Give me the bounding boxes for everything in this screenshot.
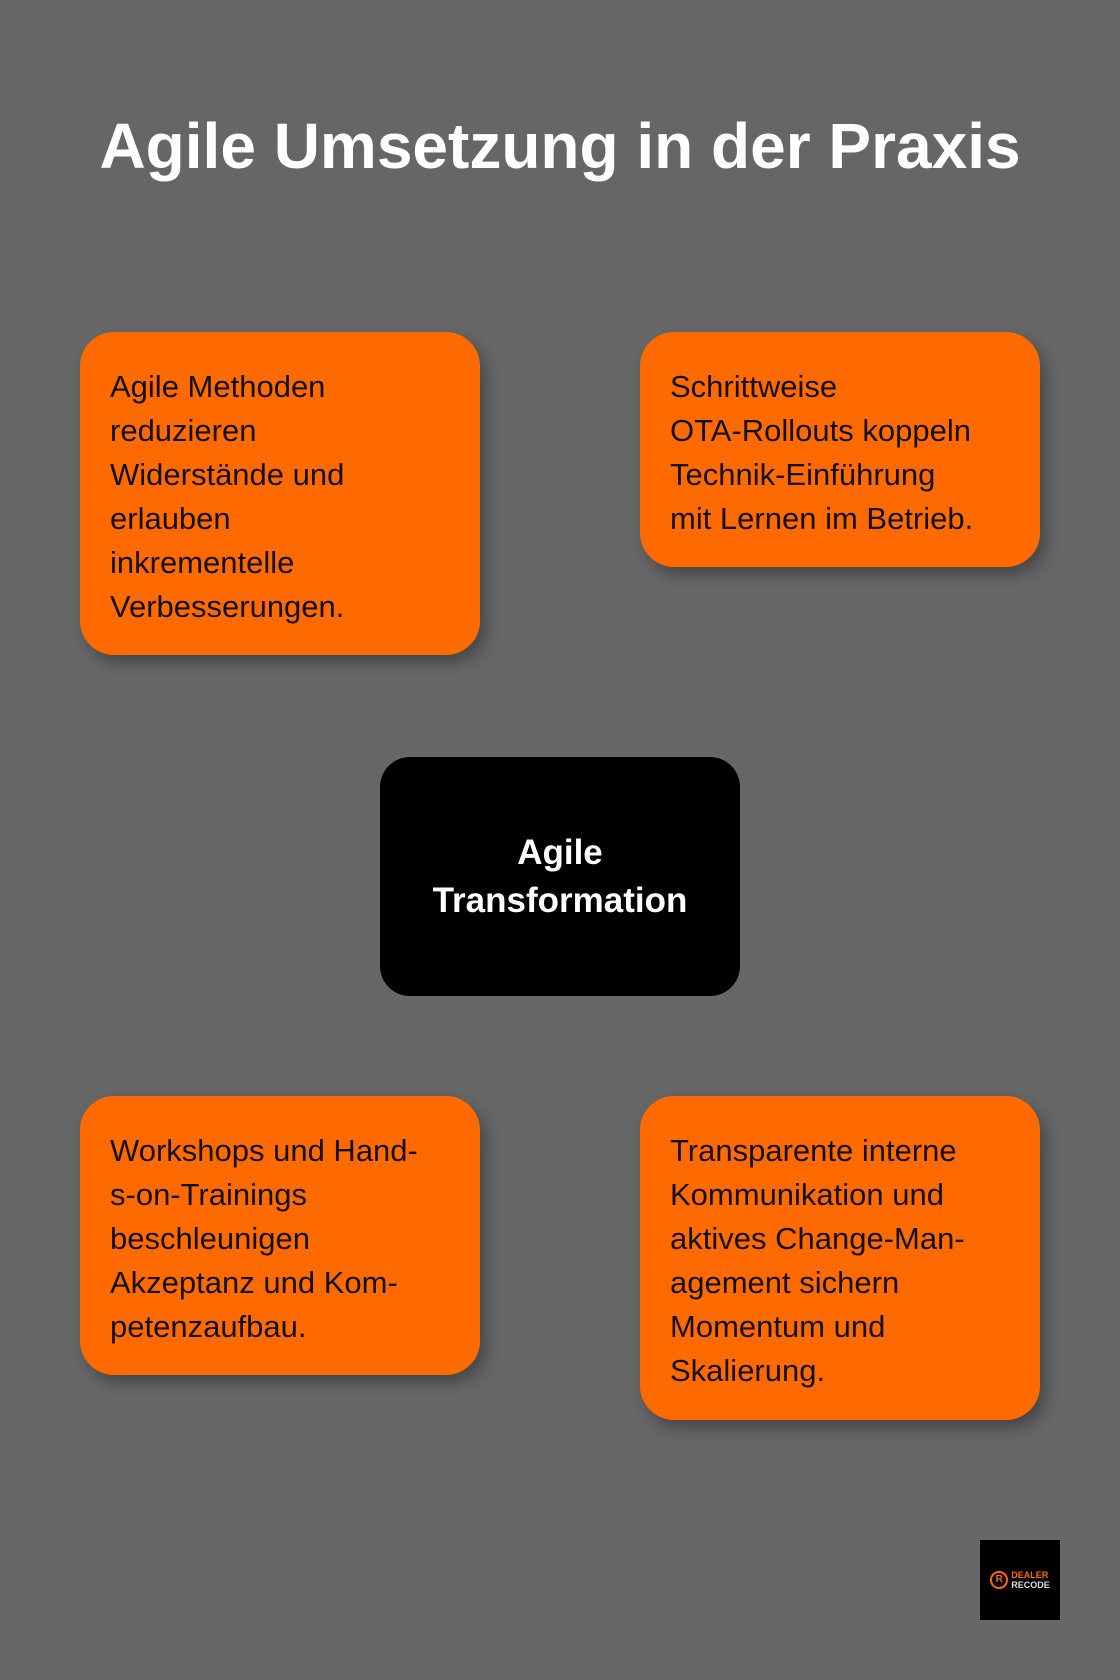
panel: bottom left: s-on-Trainings <box>110 1177 307 1212</box>
panel: bottom right <box>640 1096 1040 1420</box>
title: Agile Umsetzung in der Praxis <box>99 110 1021 182</box>
center: Agile Transformation: Transformation <box>433 880 687 920</box>
panel: bottom right: agement sichern <box>670 1265 899 1300</box>
panel: top right: OTA-Rollouts koppeln <box>670 413 971 448</box>
logo: Dealer Recode: R <box>996 1574 1003 1585</box>
panel: bottom right: Kommunikation und <box>670 1177 944 1212</box>
panel: top right <box>640 332 1040 567</box>
logo: Dealer Recode <box>980 1540 1060 1620</box>
logo: Dealer Recode: RECODE <box>1011 1580 1050 1590</box>
panel: bottom right: Momentum und <box>670 1309 885 1344</box>
panel: bottom left <box>80 1096 480 1375</box>
panel: top left: inkrementelle <box>110 545 294 580</box>
panel: top left: Agile Methoden <box>110 369 325 404</box>
panel: bottom right: aktives Change-Man- <box>670 1221 965 1256</box>
panel: top left: reduzieren <box>110 413 256 448</box>
logo: Dealer Recode: DEALER <box>1011 1570 1048 1580</box>
panel: bottom left: Workshops und Hand- <box>110 1133 418 1168</box>
center: Agile Transformation <box>380 757 740 996</box>
panel: top left: Widerstände und <box>110 457 344 492</box>
panel: top left <box>80 332 480 655</box>
panel: top left: Verbesserungen. <box>110 589 344 624</box>
panel: top right: Technik-Einführung <box>670 457 935 492</box>
panel: top left: erlauben <box>110 501 231 536</box>
panel: top right: mit Lernen im Betrieb. <box>670 501 973 536</box>
panel: top right: Schrittweise <box>670 369 837 404</box>
center: Agile Transformation: Agile <box>517 832 603 872</box>
panel: bottom left: Akzeptanz und Kom- <box>110 1265 398 1300</box>
panel: bottom left: beschleunigen <box>110 1221 310 1256</box>
panel: bottom right: Skalierung. <box>670 1353 825 1388</box>
panel: bottom right: Transparente interne <box>670 1133 957 1168</box>
panel: bottom left: petenzaufbau. <box>110 1309 307 1344</box>
